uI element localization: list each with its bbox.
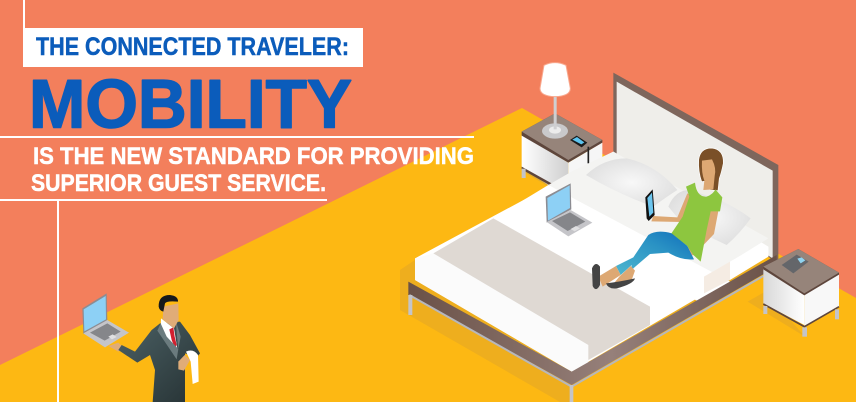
pillow side bbox=[668, 190, 751, 245]
woman's hair bbox=[699, 148, 723, 191]
subtitle line one: IS THE NEW STANDARD FOR PROVIDING bbox=[33, 143, 474, 170]
blanket bbox=[433, 218, 650, 360]
bed frame bbox=[408, 255, 777, 385]
headboard bbox=[613, 73, 778, 263]
lamp bbox=[540, 63, 570, 139]
bedroom scene bbox=[400, 63, 839, 402]
sheet corner bbox=[704, 262, 730, 293]
woman's far arm bbox=[651, 193, 694, 222]
woman's sandals bbox=[592, 264, 635, 289]
title text: THE CONNECTED TRAVELER: bbox=[36, 33, 349, 61]
heading: Mobility: MOBILITY bbox=[29, 66, 352, 142]
butler's shirt and tie bbox=[161, 318, 177, 348]
butler's lapels bbox=[157, 322, 181, 359]
frame line: top vertical bbox=[23, 0, 25, 30]
frame line: lower vertical bbox=[57, 200, 59, 402]
desk telephone bbox=[782, 255, 809, 273]
woman's face and neck bbox=[702, 159, 715, 190]
pillow back bbox=[586, 158, 677, 207]
woman's legs bbox=[598, 266, 635, 287]
butler's hair bbox=[159, 295, 178, 312]
right nightstand bbox=[763, 249, 839, 337]
laptop on bed bbox=[546, 183, 592, 236]
bed white step bbox=[730, 247, 768, 280]
woman bbox=[592, 148, 723, 289]
floor shadows bbox=[400, 260, 805, 402]
frame line: under subtitle bbox=[0, 199, 327, 201]
woman's near arm bbox=[681, 208, 719, 257]
left nightstand bbox=[522, 113, 602, 187]
butler's laptop bbox=[82, 293, 129, 347]
subtitle line two: SUPERIOR GUEST SERVICE. bbox=[31, 170, 326, 197]
butler's hand bbox=[108, 343, 124, 352]
butler's napkin and hand bbox=[178, 351, 199, 384]
charging phone bbox=[570, 136, 588, 163]
yellow floor bbox=[0, 108, 856, 402]
lower mattress shade bbox=[415, 253, 588, 372]
frame line: under Mobility bbox=[0, 136, 474, 138]
bed leg left bbox=[408, 295, 412, 315]
sheet front bbox=[493, 185, 733, 303]
woman's jeans bbox=[616, 232, 694, 275]
frame rail bbox=[409, 276, 763, 387]
butler's face bbox=[163, 303, 179, 328]
upper bed shelf bbox=[548, 152, 768, 277]
mattress bbox=[415, 152, 768, 372]
woman's tablet bbox=[645, 189, 655, 221]
bed leg front bbox=[570, 385, 573, 402]
woman's top bbox=[671, 183, 722, 262]
butler's suit bbox=[118, 322, 200, 402]
butler bbox=[82, 293, 200, 402]
title banner bbox=[23, 28, 363, 67]
